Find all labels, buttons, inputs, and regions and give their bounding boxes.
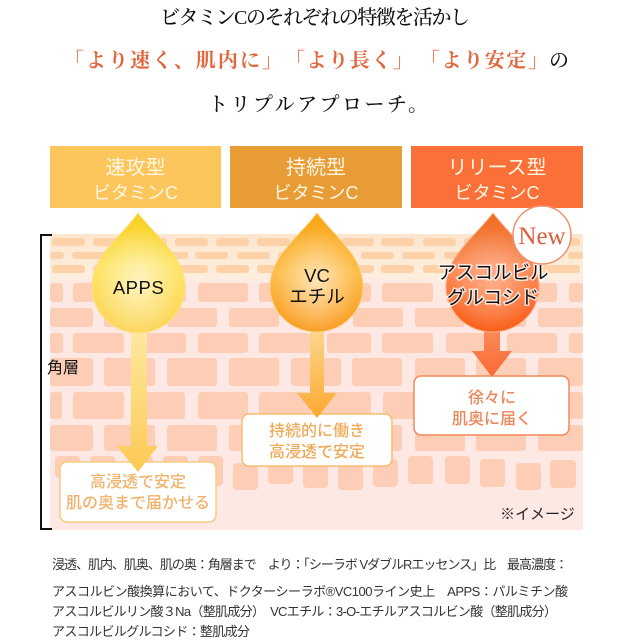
drop: VC ethyl: VC bbox=[304, 265, 330, 286]
footnotes bbox=[52, 557, 568, 639]
title: 「より安定」 bbox=[420, 49, 548, 72]
note: image only: ※イメージ bbox=[500, 506, 575, 523]
drop: VC ethyl: エチル bbox=[289, 286, 345, 307]
callout: APPS bbox=[60, 462, 216, 522]
arrow: ascorbyl glucoside bbox=[472, 330, 512, 377]
drop: ascorbyl glucoside bbox=[437, 213, 549, 332]
panel: type headers bbox=[50, 146, 583, 208]
arrow: VC ethyl bbox=[297, 330, 337, 418]
header: sustained type: 持続型 bbox=[286, 156, 346, 179]
label: stratum corneum: 角層 bbox=[47, 359, 79, 377]
title: トリプルアプローチ。 bbox=[208, 93, 428, 116]
title: ビタミンCのそれぞれの特徴を活かし bbox=[160, 6, 470, 29]
footnotes: アスコルビン酸換算において、ドクターシーラボ®VC100ライン史上 APPS：パルミチン酸 bbox=[52, 584, 568, 599]
footnotes: アスコルビルグルコシド：整肌成分 bbox=[52, 624, 250, 639]
header: release type: リリース型 bbox=[448, 156, 546, 179]
callout: APPS: 高浸透で安定 bbox=[90, 473, 186, 491]
header: release type bbox=[411, 146, 583, 208]
callout: ascorbyl glucoside: 肌奥に届く bbox=[452, 410, 532, 428]
panel: skin layer illustration bbox=[50, 234, 583, 530]
drop: ascorbyl glucoside: グルコシド bbox=[447, 287, 539, 308]
drop: APPS bbox=[92, 213, 185, 333]
callout: VC ethyl bbox=[242, 414, 392, 466]
drop: ascorbyl glucoside: アスコルビル bbox=[437, 262, 549, 283]
footnotes: 浸透、肌内、肌奥、肌の奥：角層まで より：「シーラボ VダブルRエッセンス」比 最高濃度： bbox=[52, 557, 568, 572]
title: 「より速く、肌内に」 bbox=[64, 49, 282, 72]
title: の bbox=[549, 50, 569, 72]
title bbox=[64, 6, 569, 116]
badge: New bbox=[513, 206, 571, 264]
bracket: stratum corneum range bbox=[41, 235, 52, 529]
callout: VC ethyl: 高浸透で安定 bbox=[269, 443, 365, 461]
arrow: APPS bbox=[117, 330, 158, 472]
header: fast-acting type: 速攻型 bbox=[106, 156, 166, 179]
header: fast-acting type: ビタミンC bbox=[93, 183, 178, 203]
header: fast-acting type bbox=[50, 146, 221, 208]
header: sustained type: ビタミンC bbox=[274, 183, 358, 203]
callout: APPS: 肌の奥まで届かせる bbox=[66, 494, 210, 512]
callout: ascorbyl glucoside bbox=[414, 376, 569, 435]
header: release type: ビタミンC bbox=[454, 183, 540, 203]
drop: VC ethyl bbox=[270, 213, 363, 332]
title: 「より長く」 bbox=[285, 49, 413, 72]
callout: ascorbyl glucoside: 徐々に bbox=[468, 389, 516, 407]
callout: VC ethyl: 持続的に働き bbox=[269, 422, 365, 440]
header: sustained type bbox=[230, 146, 402, 208]
drop: APPS: APPS bbox=[113, 277, 164, 298]
footnotes: アスコルビルリン酸３Na（整肌成分） VCエチル：3-O-エチルアスコルビン酸（整肌成分） bbox=[52, 604, 557, 619]
badge: New: New bbox=[518, 223, 566, 250]
